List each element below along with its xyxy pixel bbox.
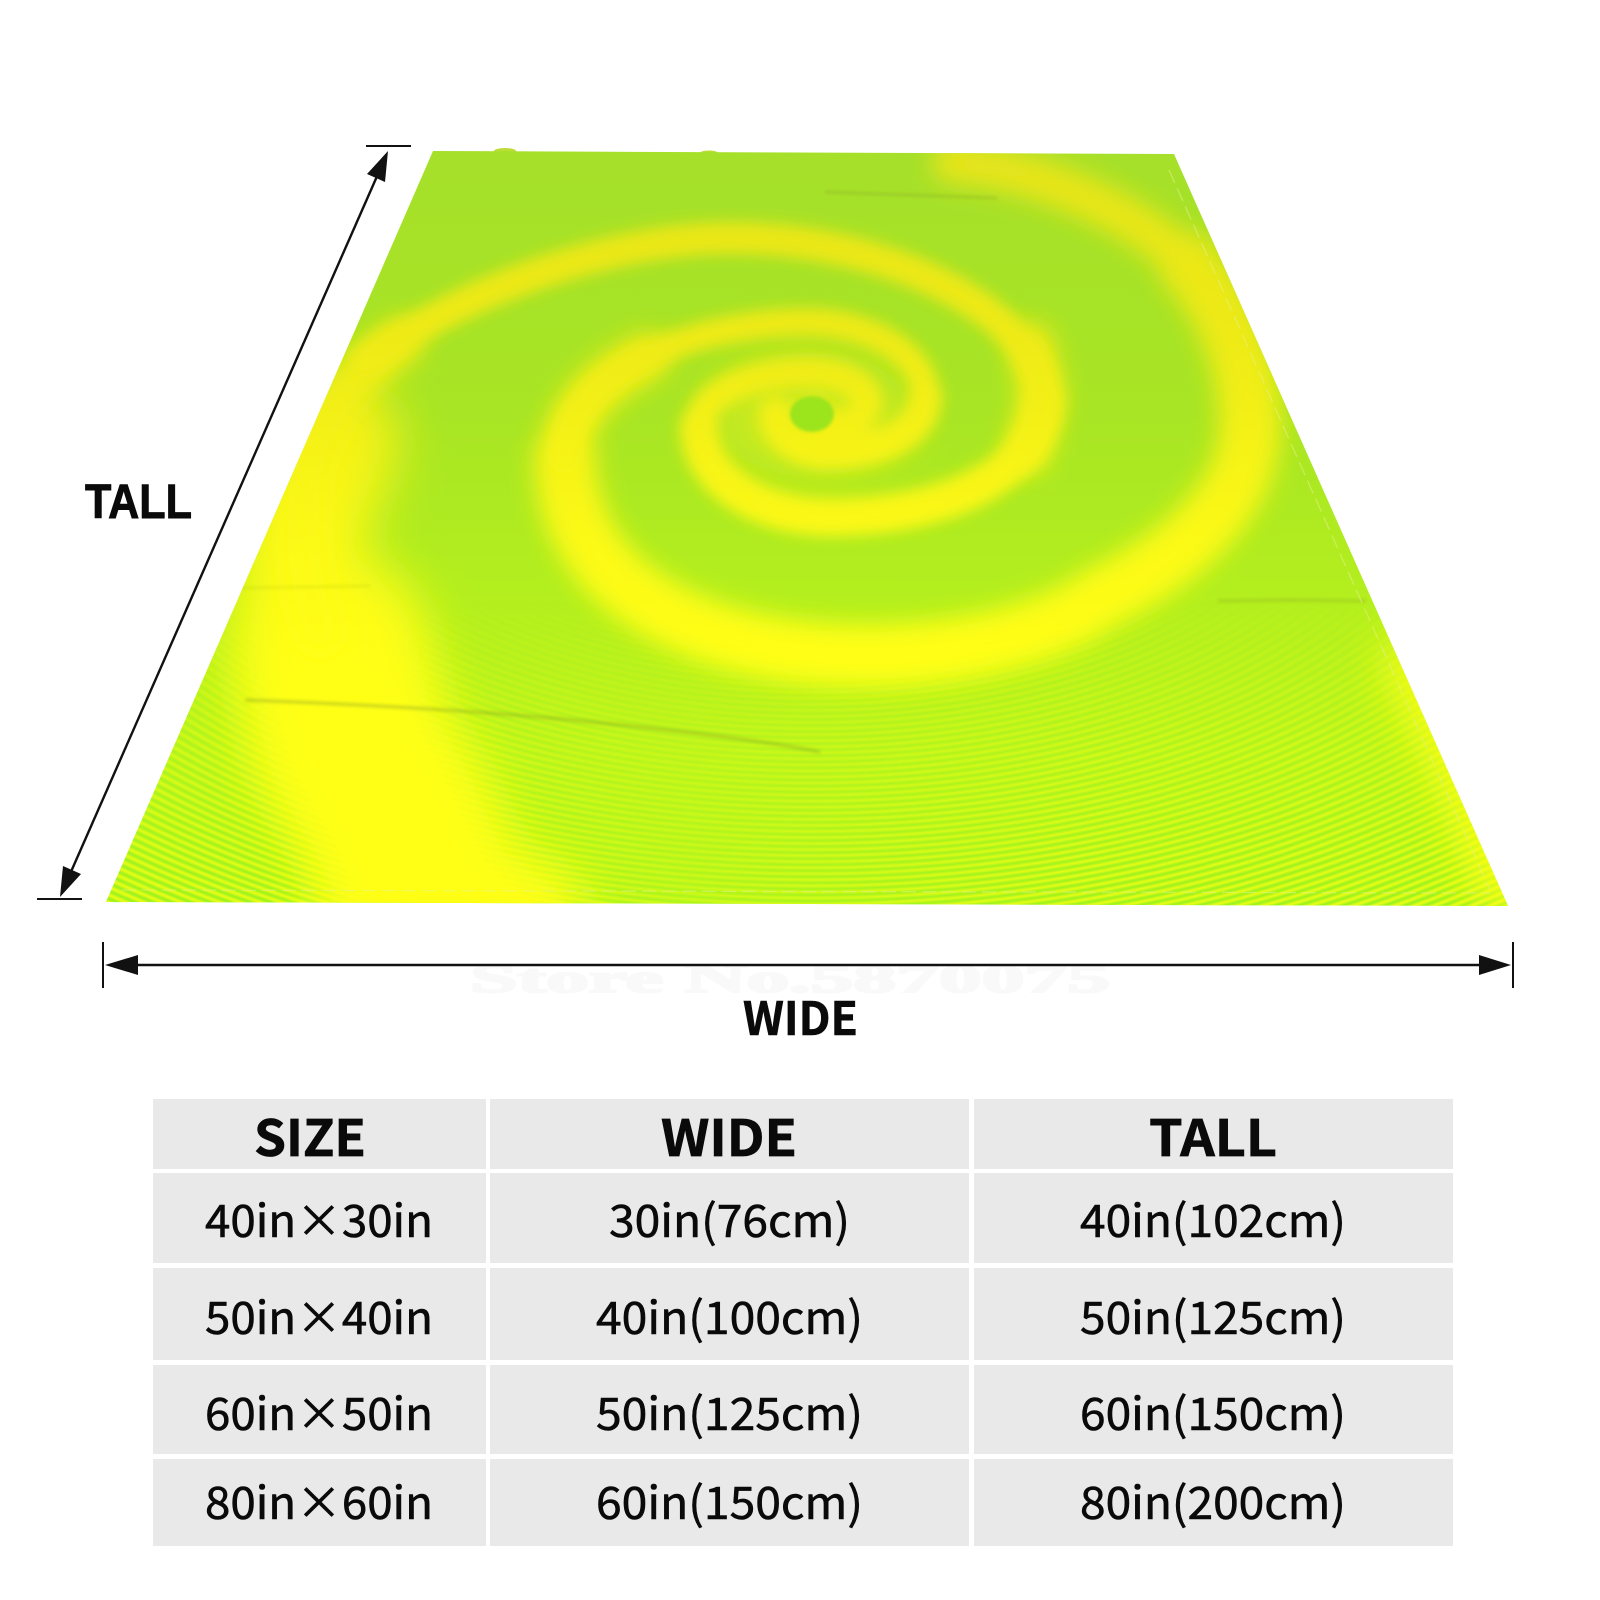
table row: 80in x 60in: 60in(150cm) [596,1467,863,1532]
size table [153,1099,1453,1546]
table header row: WIDE [661,1099,797,1171]
arrow: tall dimension [37,146,411,899]
table row: 50in x 40in [153,1268,1453,1360]
table header row: TALL [1149,1099,1277,1171]
table row: 80in x 60in: 80in×60in [205,1467,433,1532]
woven moire stripes [106,649,1508,906]
table row: 40in x 30in: 40in(102cm) [1080,1185,1346,1250]
faint store watermark: Store No.5870075 [470,956,1110,1001]
table row: 60in x 50in: 60in×50in [205,1378,433,1443]
table row: 60in x 50in: 50in(125cm) [596,1378,863,1443]
table row: 60in x 50in: 60in(150cm) [1080,1378,1346,1443]
fabric wrinkles and fold lines [240,192,1366,752]
table header row: SIZE [254,1099,366,1171]
label: WIDE: WIDE [743,983,858,1049]
blanket top hem bumps [494,148,923,156]
table row: 80in x 60in: 80in(200cm) [1080,1467,1346,1532]
table header row [153,1099,1453,1171]
table row: 80in x 60in [153,1459,1453,1546]
blanket stitching [122,170,1490,893]
panel: blanket with spiral print [100,145,1515,965]
arrow: wide dimension [103,942,1513,988]
table row: 40in x 30in [153,1173,1453,1263]
label: TALL: TALL [85,476,192,529]
table row: 50in x 40in: 50in×40in [205,1282,433,1347]
table row: 40in x 30in: 30in(76cm) [609,1185,850,1250]
table row: 50in x 40in: 50in(125cm) [1080,1282,1346,1347]
table row: 40in x 30in: 40in×30in [205,1185,433,1250]
table row: 50in x 40in: 40in(100cm) [596,1282,863,1347]
table row: 60in x 50in [153,1365,1453,1454]
spiral centre spot [790,396,834,432]
blanket spiral artwork [100,145,1515,965]
